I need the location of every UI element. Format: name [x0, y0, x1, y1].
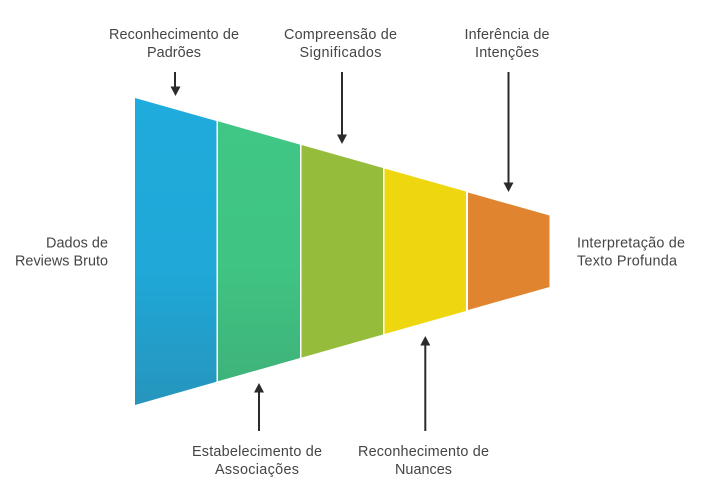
label: Reconhecimento de Padrões: Padrões — [147, 45, 201, 61]
label: Reconhecimento de Nuances: Reconhecimento de — [358, 444, 489, 460]
label: Interpretação de Texto Profunda: Interpretação de — [577, 236, 685, 252]
stage 4: yellow — [384, 168, 466, 334]
label: Estabelecimento de Associações: Estabelecimento de — [192, 444, 322, 460]
label: Reconhecimento de Padrões: Reconhecimento de — [109, 27, 239, 43]
label: Estabelecimento de Associações: Associações — [215, 462, 299, 478]
label: Compreensão de Significados: Significados — [300, 45, 382, 61]
stage 2: green — [218, 121, 300, 381]
arrow: to stage 2 — [254, 383, 264, 431]
label: Inferência de Intenções: Intenções — [475, 45, 539, 61]
stage 1: blue — [135, 98, 216, 405]
arrow: to stage 1 — [170, 72, 180, 96]
label: Dados de Reviews Bruto: Dados de — [46, 236, 108, 252]
label: Inferência de Intenções: Inferência de — [464, 27, 550, 43]
label: Interpretação de Texto Profunda: Texto Profunda — [577, 254, 677, 270]
stage 5: orange — [468, 192, 550, 310]
funnel stages — [135, 98, 550, 405]
arrow: to stage 4 — [420, 336, 430, 431]
arrow: to stage 5 — [504, 72, 514, 192]
arrow: to stage 3 — [337, 72, 347, 144]
label: Reconhecimento de Nuances: Nuances — [395, 462, 452, 478]
label: Dados de Reviews Bruto: Reviews Bruto — [15, 254, 108, 270]
stage 3: olive green — [302, 145, 383, 358]
label: Compreensão de Significados: Compreensão de — [284, 27, 397, 43]
